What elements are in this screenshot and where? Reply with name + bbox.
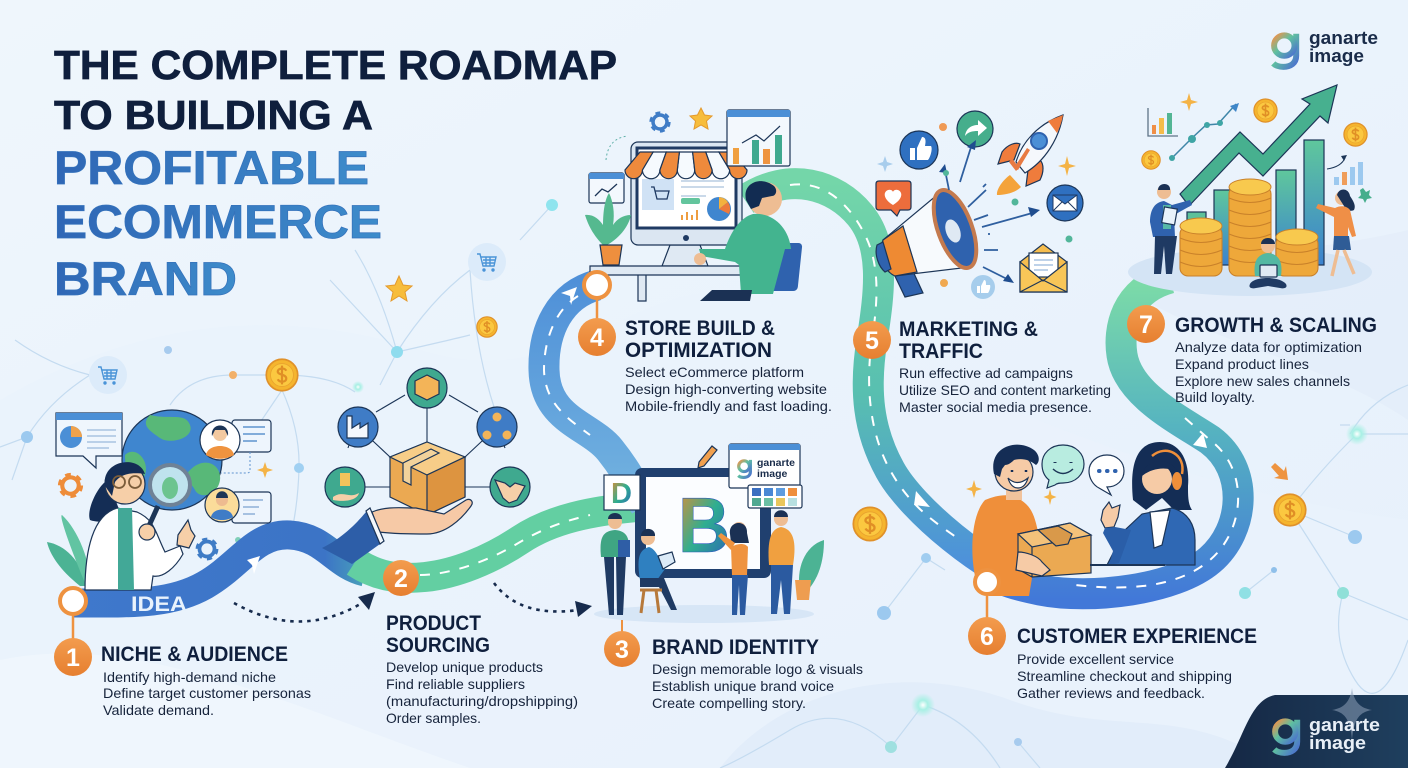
number badge: 4 — [590, 324, 604, 352]
heading: CUSTOMER EXPERIENCE — [1017, 625, 1257, 648]
step 5: marketing and traffic — [853, 318, 1111, 415]
figure: presenter woman — [1316, 189, 1356, 276]
bars — [1187, 140, 1324, 267]
body text: Order samples. — [386, 710, 481, 726]
icon: pencil — [698, 446, 717, 468]
road: idea to sourcing — [73, 506, 650, 603]
body text — [103, 669, 311, 718]
heading: GROWTH & SCALING — [1175, 314, 1377, 337]
illustration: product sourcing — [322, 368, 530, 564]
road: store to customer experience — [745, 184, 1040, 590]
logo: top right: ganarte — [1309, 28, 1378, 48]
logo: bottom right panel — [1225, 688, 1408, 768]
number badge: 1 — [66, 644, 80, 672]
body text — [386, 659, 578, 726]
icon: mail badge — [1047, 185, 1083, 221]
growth arrow — [1180, 85, 1337, 206]
dashed arrow 1 to 2 — [234, 592, 375, 622]
persona cards — [200, 420, 271, 523]
number badge — [968, 617, 1006, 655]
step 1: niche and audience — [54, 588, 311, 718]
icon: megaphone — [876, 185, 985, 297]
icon: hand and sleeve — [322, 499, 472, 564]
body text: Master social media presence. — [899, 399, 1092, 415]
body text: (manufacturing/dropshipping) — [386, 693, 578, 709]
person at desk — [694, 181, 802, 301]
figure: presenter man — [1150, 184, 1192, 274]
icon: coins — [1142, 99, 1367, 169]
logo: bottom right panel: ganarte — [1309, 715, 1380, 735]
body text: Provide excellent service — [1017, 651, 1174, 667]
step 7: growth and scaling — [1127, 305, 1377, 405]
customer — [972, 445, 1039, 596]
title: THE COMPLETE ROADMAP — [54, 42, 617, 88]
team figures — [601, 510, 794, 615]
body text: Gather reviews and feedback. — [1017, 685, 1205, 701]
heading: OPTIMIZATION — [625, 339, 772, 362]
parcel — [1018, 523, 1091, 577]
body text: Identify high-demand niche — [103, 669, 276, 685]
heading: BRAND IDENTITY — [652, 636, 819, 659]
body text: Select eCommerce platform — [625, 364, 804, 380]
icon: gears — [60, 462, 273, 558]
illustration: brand identity — [594, 444, 824, 623]
card: brand logo: ganarte — [757, 457, 795, 469]
heading — [386, 612, 490, 657]
step 3: brand identity — [604, 620, 863, 711]
number badge — [578, 318, 616, 356]
road start marker — [60, 588, 86, 614]
signal arrows — [945, 144, 1036, 281]
icon: smile bubble — [1042, 445, 1084, 488]
title: TO BUILDING A — [54, 92, 373, 138]
icon: shop awning — [625, 152, 747, 179]
chart card — [56, 413, 122, 468]
icon: rocket — [997, 115, 1063, 195]
plant — [47, 515, 92, 590]
step 6: customer experience — [968, 570, 1257, 701]
title: BRAND — [54, 252, 237, 305]
hand — [1016, 552, 1050, 576]
body text — [1175, 339, 1362, 405]
decorative floating icons — [89, 243, 1306, 543]
body text: Find reliable suppliers — [386, 676, 525, 692]
desk — [590, 266, 750, 301]
icon: supplier nodes — [325, 368, 530, 507]
body text — [652, 661, 863, 711]
body text: Design memorable logo & visuals — [652, 661, 863, 677]
illustration: marketing — [876, 111, 1083, 299]
heading: NICHE & AUDIENCE — [101, 643, 288, 666]
illustration: customer experience — [966, 442, 1195, 596]
icon: potted plant — [585, 193, 631, 265]
body text — [899, 365, 1111, 415]
number badge — [853, 321, 891, 359]
tablet — [635, 468, 771, 578]
icon: share — [957, 111, 993, 147]
heading — [899, 318, 1038, 363]
number badge — [1127, 305, 1165, 343]
body text: Validate demand. — [103, 702, 214, 718]
heading — [625, 317, 775, 362]
illustration: store build — [585, 108, 802, 301]
body text: Expand product lines — [1175, 356, 1309, 372]
heading: TRAFFIC — [899, 340, 983, 363]
icon: heart bubble — [876, 181, 911, 216]
body text: Explore new sales channels — [1175, 373, 1350, 389]
icon: monitor — [631, 142, 742, 266]
body text: Design high-converting website — [625, 381, 827, 397]
body text: Create compelling story. — [652, 695, 806, 711]
number badge — [383, 560, 419, 596]
title: PROFITABLE — [54, 141, 369, 194]
number badge: 3 — [615, 636, 629, 664]
title: ECOMMERCE — [54, 195, 382, 248]
number badge — [54, 638, 92, 676]
icon: analytics windows — [589, 108, 790, 203]
road: customer experience to growth — [985, 278, 1238, 594]
card: colour palette — [748, 485, 802, 508]
number badge: 5 — [865, 327, 879, 355]
heading: PRODUCT — [386, 612, 481, 635]
icon: thumbs up — [900, 131, 938, 169]
heading: SOURCING — [386, 634, 490, 657]
illustration: growth and scaling — [1128, 85, 1372, 296]
sparkles — [966, 480, 1056, 505]
icon: envelope — [1020, 244, 1067, 292]
heading: MARKETING & — [899, 318, 1038, 341]
body text: Establish unique brand voice — [652, 678, 834, 694]
logo: top right — [1273, 28, 1378, 67]
network lines and nodes — [0, 199, 1408, 768]
body text — [1017, 651, 1232, 701]
illustration: niche research — [47, 410, 273, 590]
body text: Streamline checkout and shipping — [1017, 668, 1232, 684]
title — [54, 42, 617, 305]
road marker — [584, 272, 610, 298]
logo: bottom right panel: image — [1309, 733, 1366, 753]
icon: like bubble — [971, 275, 995, 299]
logo: top right: image — [1309, 46, 1364, 66]
step 4: store build and optimization — [578, 272, 832, 414]
body text: Utilize SEO and content marketing — [899, 382, 1111, 398]
number badge — [604, 631, 640, 667]
researcher — [85, 462, 195, 590]
number badge: 2 — [394, 565, 408, 593]
icon: globe — [122, 410, 222, 510]
card: brand logo: image — [757, 468, 788, 480]
body text: Build loyalty. — [1175, 389, 1255, 405]
icon: chat bubble — [1089, 455, 1124, 495]
icon: parcel — [390, 442, 465, 515]
road label: IDEA — [131, 593, 187, 616]
step 2: product sourcing — [383, 560, 578, 726]
number badge: 6 — [980, 623, 994, 651]
coin stacks — [1180, 179, 1318, 276]
arrow heads and sparkles — [877, 123, 1076, 287]
road: brand to store — [544, 285, 645, 505]
body text: Run effective ad campaigns — [899, 365, 1073, 381]
big letter B: B — [678, 481, 730, 569]
figure: seated analyst — [1249, 238, 1287, 288]
body text: Develop unique products — [386, 659, 543, 675]
card: brand logo — [729, 444, 800, 488]
card: D logo — [604, 475, 640, 510]
heading: STORE BUILD & — [625, 317, 775, 340]
body text: Define target customer personas — [103, 685, 311, 701]
body text — [625, 364, 832, 414]
card: D logo: D — [611, 478, 632, 510]
road marker — [975, 570, 999, 594]
number badge: 7 — [1139, 311, 1153, 339]
body text: Mobile-friendly and fast loading. — [625, 398, 832, 414]
body text: Analyze data for optimization — [1175, 339, 1362, 355]
plant — [795, 540, 824, 600]
mini charts and trend — [1148, 93, 1372, 203]
support agent — [1090, 442, 1195, 566]
dashed arrow 2 to 3 — [494, 583, 592, 617]
